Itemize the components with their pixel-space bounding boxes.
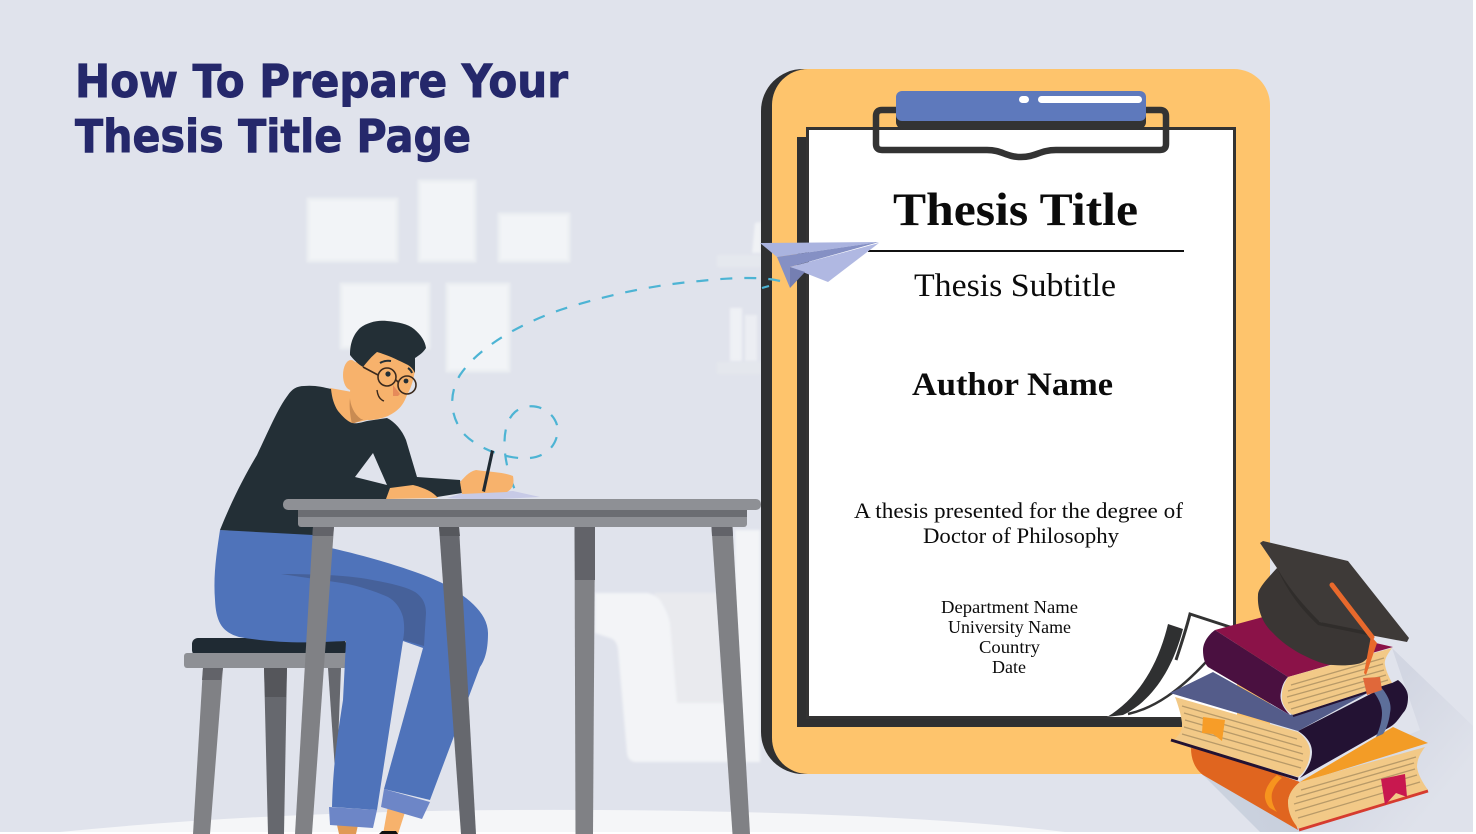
neck <box>330 388 367 424</box>
degree statement: Doctor of Philosophy <box>923 523 1119 548</box>
page curl <box>1107 614 1237 717</box>
institution details: Country <box>979 637 1040 657</box>
paper plane <box>760 242 879 288</box>
back legs <box>439 527 750 834</box>
clipboard <box>761 69 1270 774</box>
clip <box>876 91 1166 157</box>
smile <box>377 390 384 401</box>
nose <box>393 385 400 396</box>
graduation cap <box>1258 541 1409 695</box>
page title <box>75 55 569 163</box>
thesis subtitle: Thesis Subtitle <box>914 268 1116 304</box>
book stack <box>1170 541 1473 832</box>
table <box>283 499 761 834</box>
title rule <box>868 250 1184 252</box>
background armchair <box>595 530 760 762</box>
front leg <box>295 527 334 834</box>
bottom book <box>1191 727 1428 830</box>
feet <box>337 806 407 834</box>
hair <box>350 321 426 373</box>
stool <box>184 638 349 834</box>
flight path <box>452 278 780 490</box>
author name: Author Name <box>912 367 1113 403</box>
middle book <box>1170 672 1408 779</box>
wall shelf <box>717 222 761 374</box>
institution details: Date <box>992 657 1026 677</box>
trousers <box>214 530 488 828</box>
student <box>214 321 540 834</box>
institution details: Department Name <box>941 597 1078 617</box>
paper <box>797 128 1234 727</box>
brows <box>380 361 412 373</box>
sweater <box>220 386 462 535</box>
page title: Thesis Title Page <box>75 110 471 163</box>
floor <box>60 810 1065 832</box>
degree statement <box>854 498 1184 548</box>
institution details: University Name <box>948 617 1071 637</box>
cast shadow <box>1203 648 1473 832</box>
thesis title: Thesis Title <box>893 184 1138 236</box>
degree statement: A thesis presented for the degree of <box>854 498 1184 523</box>
head <box>343 321 426 420</box>
tassel <box>1332 585 1382 695</box>
notebook <box>447 491 540 500</box>
top book <box>1203 617 1393 716</box>
glasses <box>363 367 416 394</box>
page title: How To Prepare Your <box>75 55 569 108</box>
hand and pen <box>460 450 513 494</box>
institution details <box>941 597 1078 677</box>
forearm <box>386 485 438 499</box>
eyes <box>385 371 391 377</box>
tabletop <box>283 499 761 527</box>
wall picture frames <box>308 181 569 371</box>
clipboard board <box>761 69 1270 774</box>
